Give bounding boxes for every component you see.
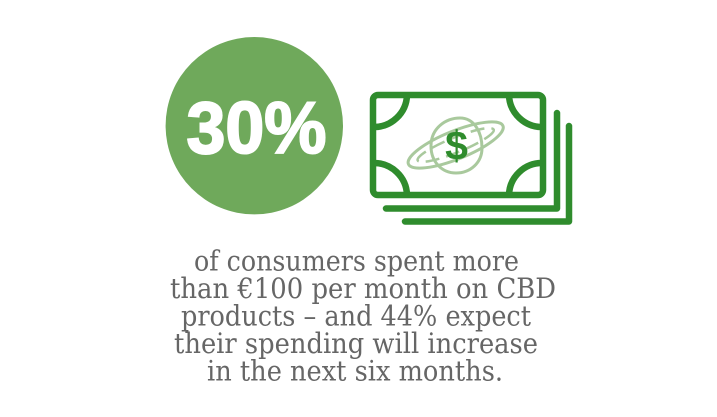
text block: description: in the next six months. [207, 354, 503, 388]
text block: description: than €100 per month on CBD [170, 272, 556, 305]
text block: description: products – and 44% expect [181, 300, 532, 332]
text block: description: of consumers spent more [194, 244, 519, 278]
text block: description: their spending will increase [174, 327, 538, 360]
stat circle: 30% [166, 37, 343, 214]
stat circle: 30%: 30% [186, 88, 326, 169]
icon: planet coin emblem [403, 113, 508, 177]
icon: stack of banknotes [373, 95, 569, 222]
text block: description [170, 244, 556, 388]
icon: planet coin emblem: $ [445, 122, 468, 168]
